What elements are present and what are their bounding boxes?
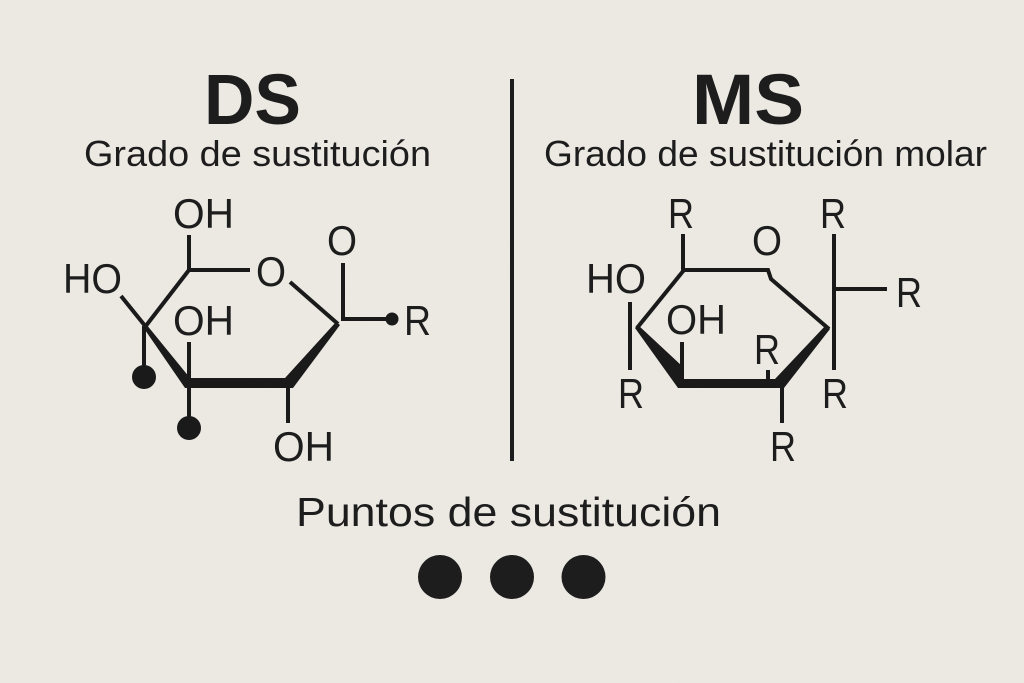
panel: MS	[544, 61, 987, 470]
atom labels	[586, 190, 922, 470]
atom labels: R	[618, 370, 644, 417]
legend: puntos de sustitución	[296, 489, 721, 599]
atom labels: R	[770, 423, 796, 470]
atom labels: HO	[586, 255, 646, 302]
atom labels: OH	[173, 297, 234, 344]
heading: DS: DS	[204, 61, 301, 140]
atom labels: O	[327, 217, 357, 264]
atom labels: R	[820, 190, 846, 237]
atom labels	[63, 190, 431, 470]
atom labels: R	[754, 326, 780, 373]
legend dots	[418, 555, 606, 599]
divider	[510, 79, 514, 461]
atom labels: R	[822, 370, 848, 417]
ring bonds	[121, 235, 392, 428]
subtitle: grado de sustitución molar: Grado de sustitución molar	[544, 133, 987, 174]
panel: DS	[63, 61, 431, 470]
atom labels: R	[896, 269, 922, 316]
ring bonds	[630, 234, 887, 423]
atom labels: OH	[666, 296, 726, 343]
substitution dots	[132, 312, 398, 440]
thick wedge bonds	[143, 322, 340, 388]
atom labels: HO	[63, 255, 122, 302]
molecule: MS ring structure	[586, 190, 922, 470]
heading: MS: MS	[692, 61, 804, 140]
atom labels: O	[752, 217, 782, 264]
atom labels: R	[404, 297, 431, 344]
atom labels: OH	[173, 190, 234, 237]
atom labels: OH	[273, 423, 334, 470]
molecule: DS ring structure	[63, 190, 431, 470]
subtitle: grado de sustitución: Grado de sustitución	[84, 133, 431, 174]
atom labels: O	[256, 248, 286, 295]
thick wedge bonds	[635, 325, 830, 388]
legend label: Puntos de sustitución	[296, 489, 721, 535]
atom labels: R	[668, 190, 694, 237]
